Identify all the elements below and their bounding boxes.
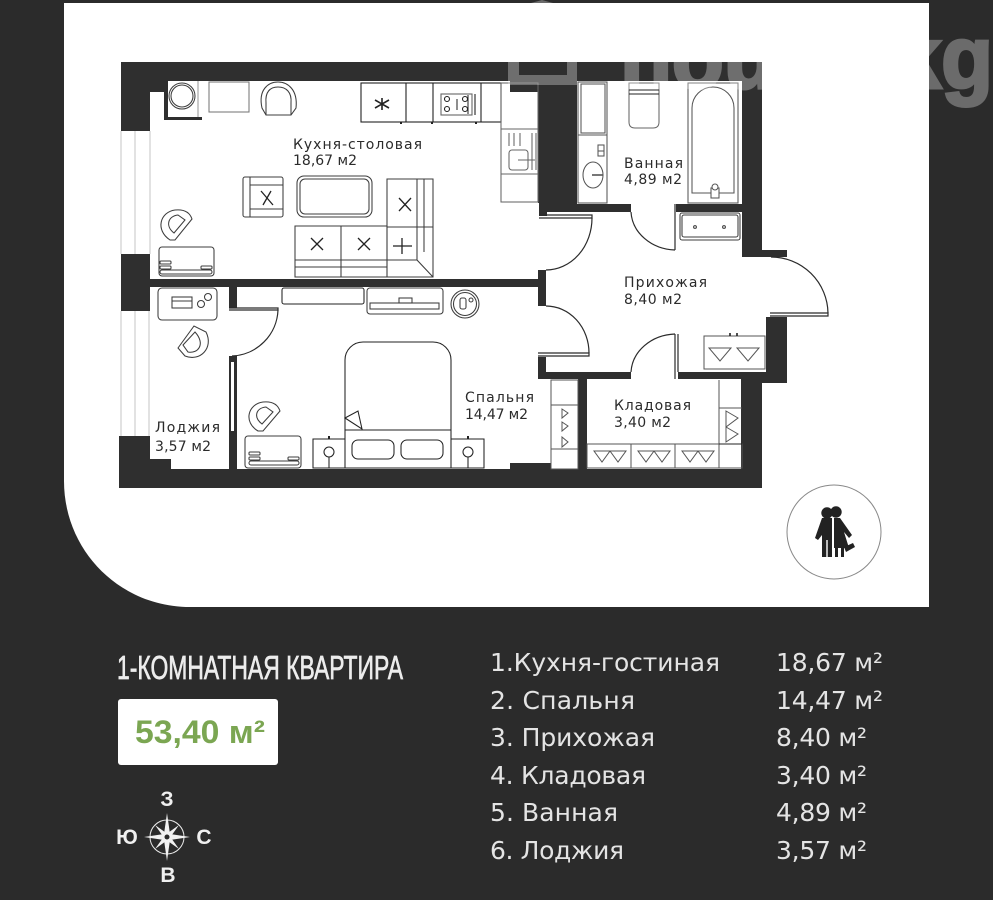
walls	[119, 62, 787, 488]
compass	[116, 788, 212, 887]
bathroom fixtures	[578, 82, 740, 240]
row bathroom	[490, 798, 867, 827]
window: kitchen	[121, 131, 150, 436]
row kitchen: 1.Кухня-гостиная	[490, 648, 720, 677]
bathtub	[688, 83, 738, 203]
label storage: 3,40 м2	[614, 415, 671, 431]
tv unit	[367, 288, 443, 314]
kitchen cabinets	[361, 83, 501, 124]
row kitchen: 18,67 м²	[776, 648, 883, 677]
bedroom and loggia furniture	[158, 288, 484, 468]
kitchen chair	[161, 210, 192, 240]
compass: В	[160, 864, 176, 887]
room area list	[490, 648, 883, 865]
title: 1-КОМНАТНАЯ КВАРТИРА	[117, 649, 403, 686]
watermark logo	[508, 62, 577, 85]
row storage	[490, 761, 867, 790]
compass: З	[160, 788, 174, 811]
label bathroom: Ванная	[624, 156, 683, 172]
pantry shelves	[587, 380, 742, 468]
label storage: Кладовая	[614, 398, 691, 414]
hall wardrobe	[704, 333, 765, 369]
bed	[345, 342, 451, 468]
toilet	[629, 83, 659, 128]
row hall: 3. Прихожая	[490, 723, 655, 752]
white plan panel	[64, 3, 929, 607]
compass: Ю	[116, 826, 138, 849]
coffee table	[297, 176, 372, 217]
area badge: 53,40 м²	[135, 714, 265, 750]
washing machine	[168, 81, 202, 117]
loggia chair	[178, 326, 208, 357]
storage cabinets	[551, 333, 765, 469]
compass: С	[196, 826, 212, 849]
kitchen desk	[159, 247, 214, 276]
label loggia: Лоджия	[155, 420, 220, 436]
row loggia: 3,57 м²	[776, 836, 867, 865]
label bedroom: Спальня	[465, 390, 534, 406]
row bedroom: 2. Спальня	[490, 686, 635, 715]
doors	[229, 204, 828, 379]
row bedroom: 14,47 м²	[776, 686, 883, 715]
row kitchen	[490, 648, 883, 677]
armchair	[243, 177, 283, 217]
round appliance	[451, 290, 479, 318]
sink unit	[501, 83, 538, 202]
row hall: 8,40 м²	[776, 723, 867, 752]
watermark roof	[531, 0, 553, 3]
label hall: Прихожая	[624, 275, 707, 291]
loggia glazing	[231, 362, 234, 431]
row storage: 3,40 м²	[776, 761, 867, 790]
label bathroom: 4,89 м2	[624, 172, 682, 188]
corner sofa	[295, 179, 433, 277]
chair	[261, 82, 296, 115]
loggia desk	[158, 288, 217, 320]
bedroom wardrobe	[551, 380, 578, 469]
label kitchen: 18,67 м2	[293, 153, 357, 169]
night stands	[313, 436, 484, 468]
bedroom desk	[245, 436, 301, 468]
label bedroom: 14,47 м2	[465, 407, 528, 423]
row bedroom	[490, 686, 883, 715]
room labels	[155, 137, 707, 455]
row bathroom: 4,89 м²	[776, 798, 867, 827]
bathroom counter	[578, 82, 607, 203]
kitchen furniture	[159, 81, 538, 277]
label loggia: 3,57 м2	[155, 439, 211, 455]
label kitchen: Кухня-столовая	[293, 137, 422, 153]
row hall	[490, 723, 867, 752]
double basin	[680, 213, 740, 240]
label hall: 8,40 м2	[624, 292, 682, 308]
watermark	[508, 0, 993, 107]
storage bar	[282, 288, 364, 304]
icon: couple	[787, 485, 881, 579]
row bathroom: 5. Ванная	[490, 798, 618, 827]
row loggia: 6. Лоджия	[490, 836, 624, 865]
row storage: 4. Кладовая	[490, 761, 646, 790]
square table	[209, 82, 249, 112]
bedroom chair	[249, 402, 280, 431]
row loggia	[490, 836, 867, 865]
area badge	[118, 699, 278, 765]
